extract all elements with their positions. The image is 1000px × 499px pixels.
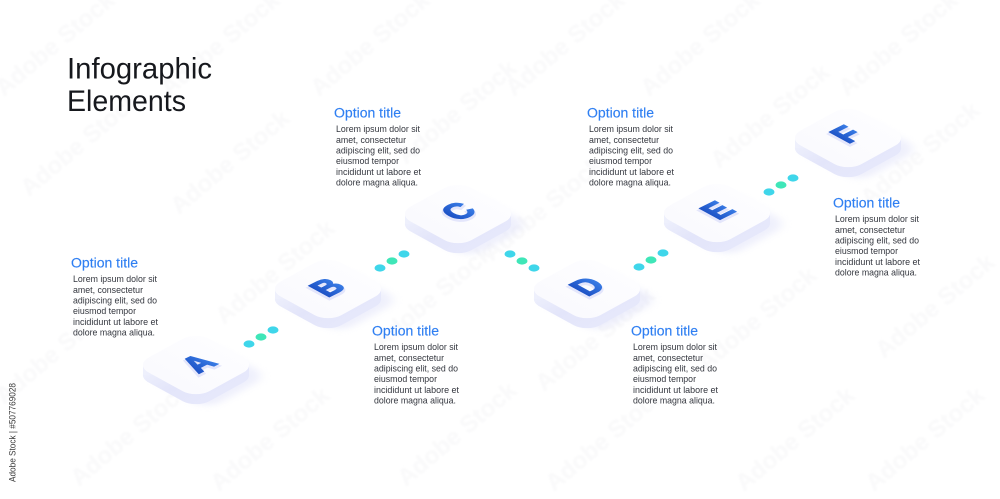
tile F: F xyxy=(822,121,871,147)
text block B: dolore magna aliqua. xyxy=(374,396,456,406)
text block F: adipiscing elit, sed do xyxy=(835,236,919,246)
title: Elements xyxy=(67,85,186,118)
text block E: amet, consectetur xyxy=(589,135,659,145)
watermark: Adobe Stock xyxy=(15,86,146,202)
title: Infographic xyxy=(67,52,212,86)
text block F xyxy=(833,196,920,278)
dots: B to C xyxy=(374,250,410,272)
tile D: D xyxy=(561,272,614,300)
tile E xyxy=(656,180,789,258)
watermark: Adobe Stock xyxy=(855,96,986,212)
text block B: Lorem ipsum dolor sit xyxy=(374,342,458,352)
tile A xyxy=(135,332,268,410)
tile C: C xyxy=(432,197,485,225)
text block E xyxy=(587,106,674,188)
text block B: Option title xyxy=(372,324,439,339)
dots: C to D xyxy=(504,250,540,272)
watermark: Adobe Stock xyxy=(478,151,609,267)
text block F: Lorem ipsum dolor sit xyxy=(835,214,919,224)
text block D: incididunt ut labore et xyxy=(633,385,718,395)
text block E: Option title xyxy=(587,106,654,121)
dots: E to F xyxy=(764,174,798,196)
text block B xyxy=(372,324,459,406)
tile F xyxy=(787,104,920,182)
text block C: incididunt ut labore et xyxy=(336,167,421,177)
text block C: adipiscing elit, sed do xyxy=(336,146,420,156)
watermark: Adobe Stock xyxy=(392,54,523,170)
text block F: amet, consectetur xyxy=(835,225,905,235)
watermark: Adobe Stock xyxy=(860,381,991,497)
text block E: Lorem ipsum dolor sit xyxy=(589,124,673,134)
watermark: Adobe Stock xyxy=(730,381,861,497)
text block A xyxy=(71,256,158,338)
tile B: B xyxy=(301,273,354,301)
text block B: adipiscing elit, sed do xyxy=(374,364,458,374)
tile C: C xyxy=(432,199,485,227)
text block C: eiusmod tempor xyxy=(336,156,399,166)
watermark: Adobe Stock xyxy=(165,104,296,220)
text block C: Lorem ipsum dolor sit xyxy=(336,124,420,134)
text block B: amet, consectetur xyxy=(374,353,444,363)
text block C: dolore magna aliqua. xyxy=(336,178,418,188)
tile E: E xyxy=(692,197,743,224)
watermark: Adobe Stock xyxy=(870,248,1000,364)
text block D: eiusmod tempor xyxy=(633,374,696,384)
text block A: Lorem ipsum dolor sit xyxy=(73,274,157,284)
watermark: Adobe Stock xyxy=(210,214,341,330)
text block D: dolore magna aliqua. xyxy=(633,396,715,406)
text block D xyxy=(631,324,718,406)
text block A: amet, consectetur xyxy=(73,285,143,295)
tile B xyxy=(267,256,400,334)
watermark: Adobe Stock xyxy=(65,376,196,492)
text block F: dolore magna aliqua. xyxy=(835,268,917,278)
text block E: adipiscing elit, sed do xyxy=(589,146,673,156)
tile F: F xyxy=(822,123,871,149)
text block D: Lorem ipsum dolor sit xyxy=(633,342,717,352)
watermark: Adobe Stock xyxy=(705,58,836,174)
text block A: eiusmod tempor xyxy=(73,306,136,316)
watermark: Adobe Stock xyxy=(530,281,661,397)
watermark: Adobe Stock xyxy=(692,261,823,377)
text block C: Option title xyxy=(334,106,401,121)
tile A: A xyxy=(172,349,225,377)
text block F: incididunt ut labore et xyxy=(835,257,920,267)
text block E: incididunt ut labore et xyxy=(589,167,674,177)
tile B: B xyxy=(301,275,354,303)
text block B: incididunt ut labore et xyxy=(374,385,459,395)
text block D: amet, consectetur xyxy=(633,353,703,363)
dots: A to B xyxy=(244,326,278,348)
text block C: amet, consectetur xyxy=(336,135,406,145)
watermark: Adobe Stock xyxy=(392,376,523,492)
dots: D to E xyxy=(634,249,668,271)
watermark: Adobe Stock xyxy=(368,239,499,355)
text block A: Option title xyxy=(71,256,138,271)
text block A: adipiscing elit, sed do xyxy=(73,296,157,306)
tile D xyxy=(526,256,659,334)
watermark: Adobe Stock xyxy=(205,381,336,497)
tile C xyxy=(397,180,530,258)
text block D: Option title xyxy=(631,324,698,339)
watermark: Adobe Stock xyxy=(540,381,671,497)
tile E: E xyxy=(692,199,743,226)
stock credit: Adobe Stock | #507769028 xyxy=(8,383,18,482)
tile A: A xyxy=(172,351,225,379)
text block F: eiusmod tempor xyxy=(835,246,898,256)
text block E: eiusmod tempor xyxy=(589,156,652,166)
text block A: dolore magna aliqua. xyxy=(73,328,155,338)
text block A: incididunt ut labore et xyxy=(73,317,158,327)
tile D: D xyxy=(561,274,614,302)
text block C xyxy=(334,106,421,188)
text block E: dolore magna aliqua. xyxy=(589,178,671,188)
text block D: adipiscing elit, sed do xyxy=(633,364,717,374)
title xyxy=(67,52,212,118)
text block F: Option title xyxy=(833,196,900,211)
text block B: eiusmod tempor xyxy=(374,374,437,384)
